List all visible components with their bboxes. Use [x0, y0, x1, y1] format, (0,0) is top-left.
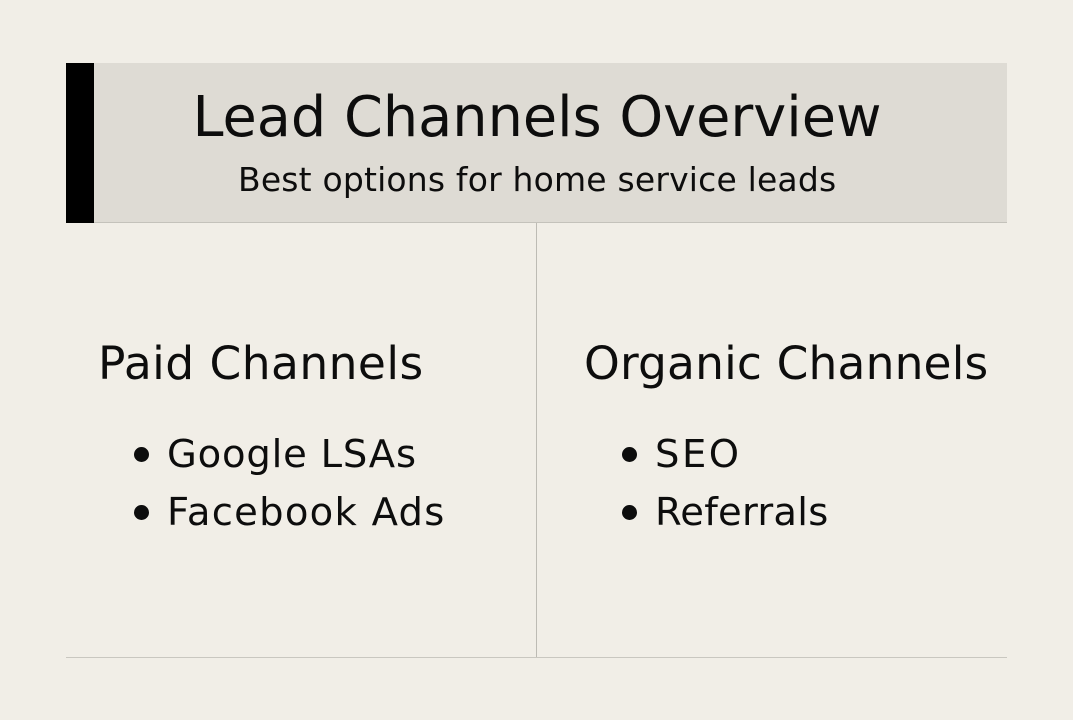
accent bar	[66, 63, 94, 223]
subtitle: Best options for home service leads	[238, 160, 836, 199]
list item: Referrals: Referrals	[655, 490, 829, 535]
heading: organic channels: Organic Channels	[584, 337, 988, 390]
list item: Facebook Ads: Facebook Ads	[167, 490, 446, 535]
panel: paid channels	[98, 337, 446, 535]
heading: paid channels: Paid Channels	[98, 337, 424, 390]
bottom rule	[66, 657, 1007, 658]
vertical divider	[536, 223, 537, 658]
panel: organic channels	[584, 337, 988, 535]
title: Lead Channels Overview	[192, 85, 882, 150]
list item: SEO: SEO	[655, 432, 742, 477]
list item: Google LSAs: Google LSAs	[167, 432, 417, 477]
header band	[66, 63, 1007, 223]
